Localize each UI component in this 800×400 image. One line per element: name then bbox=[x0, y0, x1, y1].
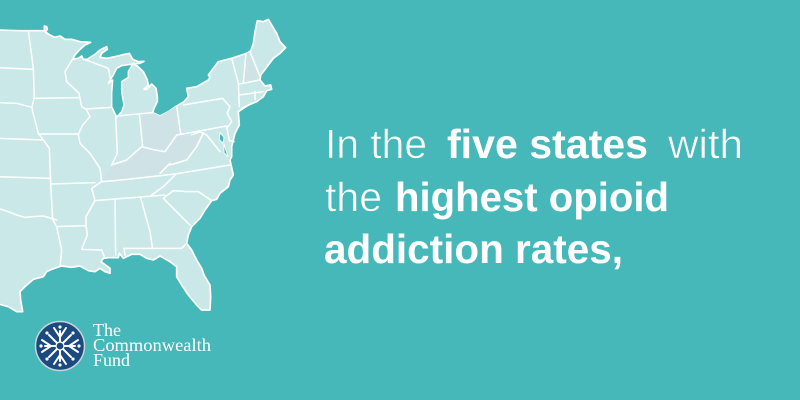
headline: In the bbox=[325, 121, 427, 167]
land silhouette bbox=[0, 19, 286, 312]
headline: with bbox=[667, 121, 743, 167]
lake Michigan and Green Bay bbox=[108, 64, 133, 117]
logo wordmark: Commonwealth bbox=[93, 335, 211, 355]
headline: highest opioid bbox=[395, 174, 669, 220]
state borders bbox=[0, 31, 263, 267]
shaded states: Ohio, Kentucky, West Virginia, New Hampshire bbox=[102, 52, 260, 182]
headline bbox=[324, 121, 743, 272]
logo wordmark: Fund bbox=[93, 350, 130, 370]
headline: five states bbox=[447, 121, 648, 167]
logo wordmark bbox=[93, 320, 211, 370]
headline: the bbox=[325, 174, 382, 220]
logo wordmark: The bbox=[93, 320, 121, 340]
headline: addiction rates, bbox=[324, 226, 623, 272]
Delaware and Chesapeake bays bbox=[219, 133, 228, 157]
icon: snowflake seal bbox=[36, 322, 84, 370]
